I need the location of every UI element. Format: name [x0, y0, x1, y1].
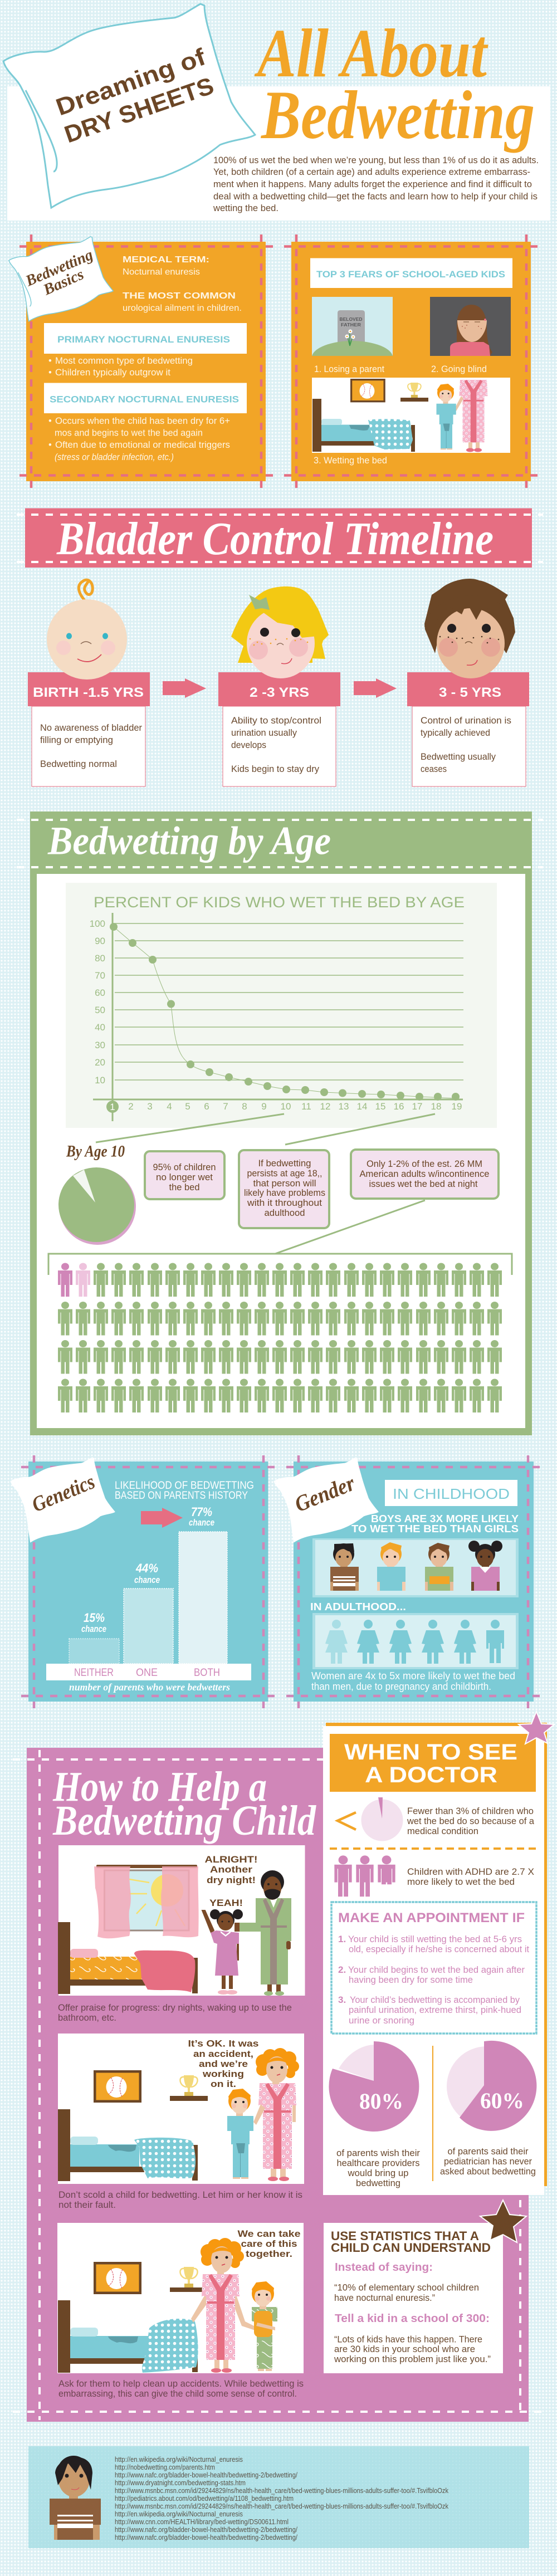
text: 2-3 yrs: urination usually — [231, 727, 297, 738]
line chart: percent of kids who wet the bed by age: 70 — [95, 970, 105, 981]
line chart: percent of kids who wet the bed by age: 8 — [242, 1101, 247, 1112]
line chart: percent of kids who wet the bed by age: 5 — [185, 1101, 190, 1112]
panel: bedwetting basics — [9, 234, 273, 488]
bar chart: parents history: chance — [134, 1575, 160, 1585]
box: make an appointment if: Your child is still wetting the bed at 5-6 yrs — [348, 1934, 522, 1944]
primary bullets: Most common type of bedwetting — [55, 356, 193, 366]
secondary bullets: • — [48, 440, 52, 450]
text: 3-5 yrs — [421, 715, 511, 774]
source list: http://en.wikipedia.org/wiki/Nocturnal_enuresis — [115, 2455, 243, 2463]
title — [254, 15, 535, 153]
icon: pillow with Dreaming of Dry Sheets: DRY SHEETS — [61, 72, 217, 148]
icon: boy — [50, 2456, 101, 2540]
callout: age 18: If bedwetting — [258, 1158, 311, 1169]
callout: adults: issues wet the bed at night — [369, 1179, 478, 1189]
text: birth: Bedwetting normal — [40, 759, 117, 769]
line chart: percent of kids who wet the bed by age: 17 — [412, 1101, 422, 1112]
intro paragraph — [213, 155, 539, 213]
speech: ALRIGHT! — [205, 1854, 257, 1865]
source list: http://en.wikipedia.org/wiki/Nocturnal_enuresis — [115, 2510, 243, 2518]
panel: use statistics: CHILD CAN UNDERSTAND — [331, 2241, 491, 2255]
timeline stage: birth — [28, 580, 150, 786]
heading: when to see a doctor: WHEN TO SEE — [344, 1740, 517, 1764]
speech — [205, 1854, 257, 1908]
icon: pillow genetics — [11, 1458, 115, 1542]
line chart: percent of kids who wet the bed by age: 90 — [95, 936, 105, 946]
source list: http://pediatrics.about.com/od/bedwetting/a/1108_bedwetting.htm — [115, 2494, 294, 2502]
panel: when to see a doctor — [323, 1723, 547, 2195]
bed — [58, 1922, 198, 1994]
source list: http://www.msnbc.msn.com/id/29244829/ns/health-health_care/t/bed-wetting-blues-millions-adults-suffer-too/#.TsvifbloOzk — [115, 2486, 448, 2495]
line chart: percent of kids who wet the bed by age: 12 — [320, 1101, 330, 1112]
pie chart: 80 percent: 80% — [359, 2089, 403, 2114]
caption scene 3 — [58, 2378, 304, 2399]
icon: brown star — [480, 2200, 526, 2242]
room — [58, 2262, 203, 2373]
bar chart: parents history: number of parents who were bedwetters — [69, 1682, 230, 1693]
heading: in childhood — [385, 1480, 517, 1506]
primary bullets: Children typically outgrow it — [55, 368, 170, 378]
panel: genetics — [11, 1455, 275, 1708]
text: 3-5 yrs: Bedwetting usually — [421, 751, 496, 762]
line chart: percent of kids who wet the bed by age: 16 — [394, 1101, 404, 1112]
secondary bullets: mos and begins to wet the bed again — [55, 428, 203, 438]
intro paragraph: 100% of us wet the bed when we’re young, but less than 1% of us do it as adults. — [213, 155, 539, 165]
line chart: percent of kids who wet the bed by age: 9 — [261, 1101, 267, 1112]
box: make an appointment if: 1. — [338, 1934, 346, 1944]
primary bullets: • — [48, 356, 52, 366]
heading: how to help: Bedwetting Child — [52, 1797, 316, 1844]
speech — [188, 2039, 258, 2089]
heading: primary nocturnal enuresis: PRIMARY NOCTURNAL ENURESIS — [57, 334, 230, 345]
heading: in childhood: IN CHILDHOOD — [393, 1485, 510, 1502]
secondary bullets: • — [48, 416, 52, 426]
caption: 60 percent: pediatrician has never — [444, 2157, 532, 2167]
bar chart: parents history: BOTH — [194, 1667, 220, 1679]
icon: pillow gender — [274, 1458, 378, 1542]
intro paragraph: Yet, both children (of a certain age) and adults experience extreme embarrass- — [213, 167, 530, 177]
child 2 — [377, 1542, 405, 1591]
illustration: gravestone — [312, 297, 393, 356]
box: make an appointment if: 3. — [338, 1995, 346, 2005]
panel: sources — [28, 2446, 529, 2548]
line chart: percent of kids who wet the bed by age: 13 — [339, 1101, 349, 1112]
panel: use statistics: “Lots of kids have this happen. There — [334, 2334, 482, 2345]
scene 2: do not scold — [58, 2034, 304, 2184]
text: fewer than 3 percent — [407, 1806, 535, 1836]
scene 1: praise — [58, 1845, 305, 1996]
heading: when to see a doctor — [330, 1734, 536, 1792]
boy — [227, 2089, 253, 2179]
bar chart: parents history: 44% — [135, 1561, 158, 1575]
panel: gender — [274, 1455, 540, 1708]
heading: top 3 fears: TOP 3 FEARS OF SCHOOL-AGED KIDS — [316, 269, 505, 280]
label: 3-5 yrs: 3 - 5 YRS — [439, 685, 501, 700]
source list: http://nobedwetting.com/parents.htm — [115, 2463, 215, 2471]
caption: wetting the bed: 3. Wetting the bed — [314, 455, 387, 466]
text: women: Women are 4x to 5x more likely to wet the bed — [311, 1670, 515, 1682]
text: 2-3 yrs: develops — [231, 740, 266, 750]
speech: We can take — [237, 2228, 301, 2239]
text: 3-5 yrs: Control of urination is — [421, 715, 511, 726]
text: birth — [40, 722, 142, 769]
bracket — [48, 1254, 512, 1275]
caption scene 1: bathroom, etc. — [58, 2012, 116, 2023]
primary bullets — [48, 356, 193, 378]
line chart: percent of kids who wet the bed by age: 15 — [375, 1101, 385, 1112]
line chart: percent of kids who wet the bed by age: 80 — [95, 953, 105, 964]
banner: bladder control timeline: Bladder Control Timeline — [56, 513, 494, 565]
box: make an appointment if: Your child begins to wet the bed again after — [348, 1964, 525, 1975]
text: 2-3 yrs: Kids begin to stay dry — [231, 764, 319, 774]
speech: It’s OK. It was — [188, 2039, 258, 2049]
heading: when to see a doctor: A DOCTOR — [365, 1763, 497, 1787]
box: make an appointment if — [331, 1902, 536, 2034]
heading: how to help — [52, 1763, 316, 1844]
line chart: percent of kids who wet the bed by age: 100 — [90, 918, 105, 929]
speech — [237, 2228, 301, 2259]
icon: pillow with Dreaming of Dry Sheets: Dreaming of — [52, 43, 209, 121]
line chart: percent of kids who wet the bed by age: 18 — [431, 1101, 441, 1112]
caption scene 3: Ask for them to help clean up accidents. While bedwetting is — [58, 2378, 304, 2389]
heading: secondary nocturnal enuresis — [44, 383, 247, 413]
primary bullets: • — [48, 368, 52, 378]
intro paragraph: wetting the bed. — [213, 203, 278, 213]
pie chart: 60 percent — [447, 2041, 536, 2131]
panel: use statistics: working on this problem just like you.” — [334, 2354, 491, 2364]
line chart: percent of kids who wet the bed by age: 2 — [128, 1101, 134, 1112]
caption scene 1: Offer praise for progress: dry nights, waking up to use the — [58, 2002, 292, 2013]
arrow — [163, 678, 206, 698]
heading: bedwetting by age: Bedwetting by Age — [47, 819, 331, 863]
medical term text: urological ailment in children. — [123, 304, 242, 313]
bar chart: parents history: 77% — [191, 1505, 212, 1519]
label: 3-5 yrs — [407, 672, 529, 786]
text: birth: filling or emptying — [40, 735, 113, 745]
text: 2-3 yrs: Ability to stop/control — [231, 715, 321, 726]
heading: secondary nocturnal enuresis: SECONDARY NOCTURNAL ENURESIS — [50, 394, 239, 404]
text: boys more likely: TO WET THE BED THAN GIRLS — [351, 1523, 519, 1534]
bar chart: parents history: NEITHER — [74, 1667, 114, 1679]
box: make an appointment if: Your child’s bedwetting is accompanied by — [350, 1995, 520, 2005]
heading: top 3 fears — [310, 258, 512, 288]
caption: 80 percent — [336, 2148, 421, 2188]
father — [234, 1870, 291, 1996]
label: 2-3 yrs — [218, 672, 340, 786]
line chart: percent of kids who wet the bed by age: 19 — [452, 1101, 462, 1112]
illustration: four children — [312, 1538, 519, 1597]
text: women: than men, due to pregnancy and childbirth. — [311, 1681, 491, 1692]
source list — [115, 2455, 448, 2541]
timeline stage: 3-5 yrs — [407, 579, 529, 786]
label: 2-3 yrs: 2 -3 YRS — [250, 685, 309, 700]
line chart: percent of kids who wet the bed by age — [66, 883, 497, 1128]
bar chart: parents history: chance — [189, 1517, 214, 1528]
speech: on it. — [211, 2079, 236, 2089]
text: fewer than 3 percent: medical condition — [407, 1826, 478, 1836]
callout: age 18: adulthood — [264, 1208, 305, 1218]
intro paragraph: deal with a bedwetting child—get the facts and learn how to help if your child is — [213, 191, 538, 202]
source list: http://www.dryatnight.com/bedwetting-stats.htm — [115, 2479, 246, 2487]
line chart: percent of kids who wet the bed by age: PERCENT OF KIDS WHO WET THE BED BY AGE — [94, 894, 465, 911]
callout lines — [96, 1114, 435, 1254]
line chart: percent of kids who wet the bed by age: 14 — [357, 1101, 367, 1112]
speech: Another — [210, 1864, 252, 1875]
text: fewer than 3 percent: wet the bed do so because of a — [407, 1816, 535, 1826]
box: make an appointment if: old, especially if he/she is concerned about it — [349, 1944, 529, 1954]
speech: YEAH! — [209, 1898, 243, 1908]
daughter — [202, 1909, 243, 1995]
icon: less-than sign — [338, 1812, 356, 1830]
chart heading — [115, 1480, 254, 1502]
line chart: percent of kids who wet the bed by age: 6 — [204, 1101, 209, 1112]
source list: http://www.nafc.org/bladder-bowel-health/bedwetting-2/bedwetting/ — [115, 2525, 297, 2534]
title: All About — [254, 15, 488, 91]
callout: 95 percent: the bed — [169, 1182, 199, 1192]
icon: pillow gender: Gender — [291, 1470, 359, 1517]
medical term text: Nocturnal enuresis — [123, 267, 200, 277]
line chart: percent of kids who wet the bed by age: 3 — [147, 1101, 153, 1112]
illustration: girl going blind — [430, 297, 511, 356]
callout: age 18: persists at age 18,, — [247, 1168, 322, 1179]
chart heading: BASED ON PARENTS HISTORY — [115, 1490, 248, 1502]
caption: 60 percent — [440, 2147, 536, 2177]
intro paragraph: ment when it happens. Many adults forget the experience and find it difficult to — [213, 179, 532, 189]
caption: 80 percent: of parents wish their — [336, 2148, 421, 2158]
icon: pillow Bedwetting Basics: Bedwetting — [23, 246, 96, 290]
boy with pillow — [252, 2281, 277, 2371]
panel: bedwetting by age — [17, 812, 543, 1435]
line chart: percent of kids who wet the bed by age: 1 — [110, 1102, 115, 1112]
text: boys more likely — [351, 1513, 519, 1534]
arrow — [141, 1508, 183, 1528]
icon: girl face — [231, 586, 329, 678]
medical term text: MEDICAL TERM: — [123, 255, 209, 265]
text: 3-5 yrs: ceases — [421, 764, 447, 774]
icon: pillow with Dreaming of Dry Sheets — [3, 4, 255, 208]
speech: care of this — [241, 2238, 297, 2249]
text: boys more likely: BOYS ARE 3X MORE LIKELY — [371, 1513, 519, 1524]
caption: 80 percent: would bring up — [347, 2168, 409, 2178]
caption: 60 percent: asked about bedwetting — [440, 2167, 536, 2177]
fear captions: 2. Going blind — [431, 364, 487, 374]
scene 3: clean up — [57, 2223, 304, 2373]
intro white panel — [7, 86, 550, 221]
medical term text: THE MOST COMMON — [123, 291, 236, 301]
secondary bullets: Occurs when the child has been dry for 6+ — [55, 416, 230, 426]
pictogram: 2.7 people — [334, 1855, 395, 1896]
callout: 95 percent — [145, 1151, 224, 1199]
line chart: percent of kids who wet the bed by age: 11 — [301, 1101, 311, 1112]
line chart: percent of kids who wet the bed by age: 50 — [95, 1005, 105, 1015]
icon: pink star — [519, 1712, 554, 1744]
timeline stage: 2-3 yrs — [218, 586, 340, 786]
text: ADHD: Children with ADHD are 2.7 X — [407, 1866, 534, 1877]
medical term text — [123, 255, 242, 313]
caption scene 2: Don’t scold a child for bedwetting. Let him or her know it is — [58, 2189, 302, 2200]
line chart: percent of kids who wet the bed by age: 4 — [167, 1101, 172, 1112]
child 1 — [330, 1543, 359, 1591]
speech: dry night! — [207, 1875, 256, 1885]
callout: adults — [351, 1150, 499, 1199]
panel: how to help a bedwetting child — [13, 1748, 543, 2422]
box: make an appointment if: painful urination, extreme thirst, pink-hued — [349, 2005, 521, 2015]
arrow — [354, 678, 397, 698]
bar chart: parents history: chance — [81, 1624, 106, 1634]
line chart: percent of kids who wet the bed by age: 40 — [95, 1022, 105, 1033]
pie chart: by age 10 — [58, 1167, 136, 1245]
panel: use statistics: “10% of elementary school children — [334, 2282, 479, 2293]
source list: http://www.msnbc.msn.com/id/29244829/ns/health-health_care/t/bed-wetting-blues-millions-adults-suffer-too/#.TsvifbloOzk — [115, 2502, 448, 2510]
heading: primary nocturnal enuresis — [44, 323, 247, 354]
room — [58, 2070, 208, 2181]
panel: use statistics: are 30 kids in your school who are — [334, 2344, 475, 2354]
child 3 — [425, 1543, 453, 1591]
line chart: percent of kids who wet the bed by age: 30 — [95, 1040, 105, 1050]
bar chart: parents history — [46, 1505, 251, 1693]
caption scene 2 — [58, 2189, 302, 2210]
pictogram: adults — [312, 1613, 519, 1669]
chart heading: LIKELIHOOD OF BEDWETTING — [115, 1480, 254, 1492]
text: 2-3 yrs — [231, 715, 321, 774]
line chart: percent of kids who wet the bed by age: 10 — [281, 1101, 291, 1112]
panel: top 3 fears — [284, 234, 538, 488]
bar chart: parents history: ONE — [136, 1667, 158, 1679]
caption: 60 percent: of parents said their — [448, 2147, 529, 2157]
box: make an appointment if: urine or snoring — [349, 2015, 414, 2026]
illustration: gravestone: FATHER — [341, 322, 361, 328]
source list: http://www.nafc.org/bladder-bowel-health/bedwetting-2/bedwetting/ — [115, 2533, 297, 2541]
panel: use statistics: USE STATISTICS THAT A — [331, 2229, 479, 2243]
text: fewer than 3 percent: Fewer than 3% of children who — [407, 1806, 534, 1816]
line chart: percent of kids who wet the bed by age: 7 — [223, 1101, 228, 1112]
panel: use statistics — [324, 2223, 503, 2373]
speech: an accident, — [193, 2049, 253, 2059]
text: ADHD — [407, 1866, 534, 1887]
callout: 95 percent: no longer wet — [156, 1172, 213, 1182]
pie chart: 60 percent: 60% — [480, 2088, 524, 2113]
label: birth — [28, 672, 150, 786]
panel: use statistics: Tell a kid in a school of 300: — [335, 2313, 490, 2325]
line chart: percent of kids who wet the bed by age: 60 — [95, 988, 105, 998]
callout: 95 percent: 95% of children — [153, 1162, 216, 1172]
text: ADHD: more likely to wet the bed — [407, 1876, 515, 1887]
window — [94, 1865, 199, 1938]
callout: age 18: that person will — [253, 1178, 316, 1189]
source list: http://www.cnn.com/HEALTH/library/bed-wetting/DS00611.html — [115, 2518, 289, 2526]
callout: adults: Only 1-2% of the est. 26 MM — [367, 1159, 482, 1169]
callout: age 18: likely have problems — [244, 1187, 325, 1198]
callout: age 18 — [239, 1150, 329, 1228]
icon: pillow genetics: Genetics — [28, 1470, 98, 1517]
box: make an appointment if: having been dry for some time — [349, 1974, 473, 1985]
icon: pillow Bedwetting Basics: Basics — [40, 266, 86, 299]
caption scene 1 — [58, 2002, 292, 2023]
mother — [191, 2238, 256, 2373]
caption scene 3: embarrassing, this can give the child some sense of control. — [58, 2388, 297, 2399]
icon: boy face — [424, 579, 515, 678]
icon: pillow Bedwetting Basics — [9, 237, 113, 321]
label: birth: BIRTH -1.5 YRS — [33, 685, 144, 700]
illustration: gravestone: BELOVED — [340, 316, 362, 322]
box: make an appointment if: 2. — [338, 1964, 346, 1975]
pie chart: under 3 percent — [361, 1797, 403, 1841]
line chart: percent of kids who wet the bed by age: 10 — [95, 1075, 105, 1086]
speech: together. — [246, 2248, 292, 2259]
text: birth: No awareness of bladder — [40, 722, 142, 733]
caption: 80 percent: healthcare providers — [336, 2158, 420, 2168]
pie chart: 80 percent — [329, 2041, 419, 2132]
child 4 — [468, 1541, 502, 1591]
heading: by age 10: By Age 10 — [66, 1142, 125, 1161]
text: 3-5 yrs: typically achieved — [421, 727, 490, 738]
secondary bullets: (stress or bladder infection, etc.) — [55, 452, 174, 462]
source list: http://www.nafc.org/bladder-bowel-health/bedwetting-2/bedwetting/ — [115, 2471, 297, 2479]
caption: 80 percent: bedwetting — [356, 2178, 400, 2188]
bar chart: parents history: 15% — [84, 1611, 105, 1625]
panel: use statistics: Instead of saying: — [335, 2261, 433, 2274]
secondary bullets — [48, 416, 230, 462]
heading: in adulthood: IN ADULTHOOD... — [310, 1601, 406, 1612]
secondary bullets: Often due to emotional or medical triggers — [55, 440, 230, 450]
callout: age 18: with it throughout — [247, 1197, 322, 1208]
text: women — [311, 1670, 515, 1692]
line chart: percent of kids who wet the bed by age: 20 — [95, 1057, 105, 1068]
caption scene 2: not their fault. — [58, 2199, 116, 2210]
box: make an appointment if: MAKE AN APPOINTMENT IF — [338, 1910, 525, 1925]
mother — [253, 2048, 299, 2181]
speech: and we’re — [199, 2059, 248, 2069]
icon: baby face — [47, 580, 127, 680]
callout: adults: American adults w/incontinence — [360, 1169, 489, 1179]
heading: how to help: How to Help a — [52, 1763, 267, 1810]
fear captions — [314, 364, 487, 374]
speech: working — [202, 2069, 244, 2079]
fear captions: 1. Losing a parent — [314, 364, 384, 374]
pictogram: 100 people — [58, 1263, 502, 1412]
panel: use statistics: have nocturnal enuresis.” — [334, 2293, 435, 2303]
illustration: wetting the bed — [312, 378, 510, 453]
